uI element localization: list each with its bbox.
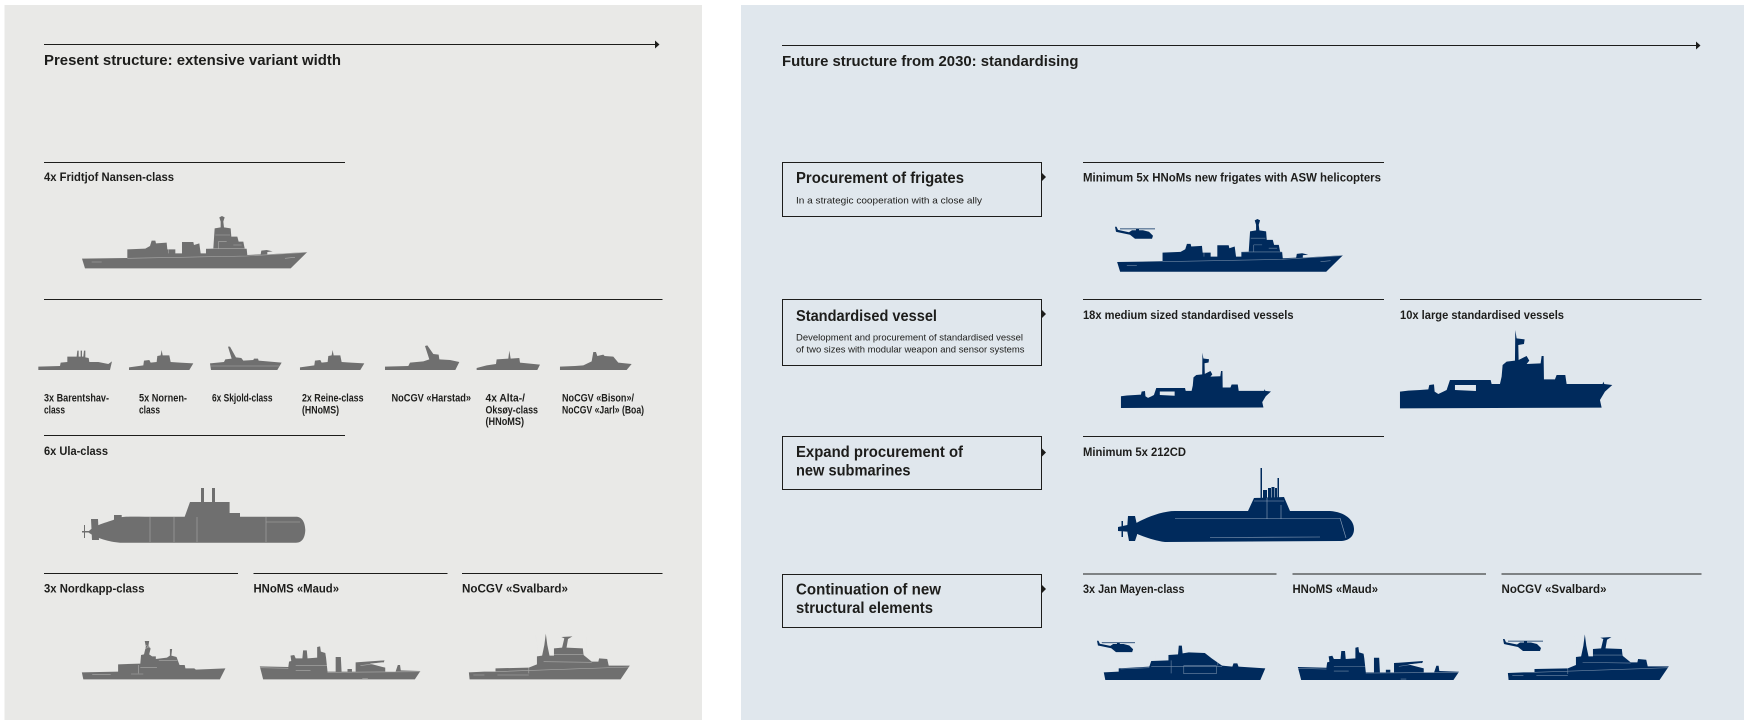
icon: helicopter bbox=[1097, 641, 1135, 652]
group: Nordkapp-class: 3x Nordkapp-class bbox=[44, 584, 144, 596]
group: Maud future: HNoMS «Maud» bbox=[1292, 584, 1378, 596]
callout: new structural elements: structural elements bbox=[796, 600, 933, 617]
label: Alta/Oksøy-class bbox=[486, 392, 538, 428]
icon: small vessels row, first four bbox=[38, 347, 364, 370]
label: Nornen-class: class bbox=[139, 404, 160, 416]
group: Maud bbox=[254, 574, 448, 679]
icon: navy submarine bbox=[1118, 468, 1354, 542]
label: Barentshav-class: class bbox=[44, 404, 65, 416]
group: 212CD bbox=[1083, 436, 1384, 542]
callout: procurement of frigates: In a strategic cooperation with a close ally bbox=[796, 196, 982, 206]
callout: standardised vessel bbox=[782, 300, 1046, 366]
group: Svalbard future bbox=[1502, 574, 1702, 680]
label: Nornen-class bbox=[139, 392, 187, 416]
icon: helicopter bbox=[1115, 227, 1155, 239]
label: Bison/Jarl bbox=[562, 392, 644, 416]
group: small vessels bbox=[38, 300, 662, 428]
icon: large vessel bbox=[1400, 330, 1612, 408]
label: Reine-class: 2x Reine-class bbox=[302, 392, 364, 404]
arrow: future timeline bbox=[782, 42, 1700, 50]
group: large vessels bbox=[1400, 300, 1702, 408]
group: Maud future bbox=[1292, 574, 1486, 680]
group: Svalbard future: NoCGV «Svalbard» bbox=[1502, 584, 1606, 596]
callout: expand submarines: new submarines bbox=[796, 462, 910, 480]
icon: grey frigate bbox=[82, 216, 307, 268]
group: Jan Mayen-class bbox=[1083, 574, 1276, 680]
group: Svalbard: NoCGV «Svalbard» bbox=[462, 584, 568, 596]
heading: future structure: Future structure from 2030: standardising bbox=[782, 54, 1078, 70]
callout: standardised vessel: of two sizes with modular weapon and sensor systems bbox=[796, 344, 1025, 356]
label: Alta/Oksøy-class: (HNoMS) bbox=[486, 416, 524, 428]
icon: medium vessel bbox=[1121, 353, 1271, 408]
callout: standardised vessel: Development and procurement of standardised vessel bbox=[796, 332, 1023, 344]
group: Nordkapp-class bbox=[44, 574, 238, 679]
callout: new structural elements bbox=[782, 574, 1046, 628]
group: Svalbard bbox=[462, 574, 662, 679]
callout: standardised vessel: Standardised vessel bbox=[796, 308, 937, 325]
callout: expand submarines bbox=[782, 436, 1046, 490]
group: Ula-class bbox=[44, 436, 345, 543]
group: Maud: HNoMS «Maud» bbox=[254, 584, 339, 596]
group: large vessels: 10x large standardised vessels bbox=[1400, 310, 1564, 322]
icon: navy frigate bbox=[1117, 219, 1343, 272]
label: Bison/Jarl: NoCGV «Jarl» (Boa) bbox=[562, 404, 644, 416]
group: 212CD: Minimum 5x 212CD bbox=[1083, 447, 1186, 459]
callout: procurement of frigates: Procurement of frigates bbox=[796, 170, 964, 187]
group: Jan Mayen-class: 3x Jan Mayen-class bbox=[1083, 584, 1184, 596]
icon: navy Svalbard ship bbox=[1508, 634, 1669, 680]
callout: new structural elements: Continuation of new bbox=[796, 582, 942, 598]
group: Fridtjof Nansen-class bbox=[44, 162, 345, 268]
group: medium vessels: 18x medium sized standardised vessels bbox=[1083, 310, 1294, 322]
panel: future structure bbox=[741, 5, 1744, 720]
group: new frigates: Minimum 5x HNoMs new frigates with ASW helicopters bbox=[1083, 172, 1381, 184]
icon: grey Nordkapp ship bbox=[82, 641, 225, 679]
callout: procurement of frigates bbox=[782, 162, 1046, 216]
label: Harstad: NoCGV «Harstad» bbox=[392, 392, 471, 404]
panel: present structure bbox=[4, 5, 702, 720]
label: Skjold-class: 6x Skjold-class bbox=[212, 392, 272, 404]
icon: Jan Mayen ship bbox=[1104, 646, 1265, 680]
group: new frigates bbox=[1083, 162, 1384, 272]
icon: grey submarine bbox=[82, 488, 305, 543]
icon: navy Maud ship bbox=[1298, 647, 1459, 680]
group: medium vessels bbox=[1083, 300, 1384, 408]
heading: present structure: Present structure: extensive variant width bbox=[44, 53, 341, 69]
label: Reine-class bbox=[302, 392, 364, 416]
callout: expand submarines: Expand procurement of bbox=[796, 444, 964, 461]
label: Barentshav-class bbox=[44, 392, 109, 416]
label: Bison/Jarl: NoCGV «Bison»/ bbox=[562, 392, 634, 404]
icon: helicopter bbox=[1503, 639, 1543, 651]
label: Nornen-class: 5x Nornen- bbox=[139, 392, 187, 404]
icon: grey Svalbard ship bbox=[469, 634, 630, 679]
label: Alta/Oksøy-class: Oksøy-class bbox=[486, 404, 538, 416]
group: Ula-class: 6x Ula-class bbox=[44, 446, 108, 458]
label: Barentshav-class: 3x Barentshav- bbox=[44, 392, 109, 404]
icon: grey Maud ship bbox=[260, 646, 420, 679]
label: Alta/Oksøy-class: 4x Alta-/ bbox=[486, 392, 525, 404]
arrow: present timeline bbox=[44, 40, 660, 48]
icon: small vessels row, last three bbox=[385, 345, 632, 370]
group: Fridtjof Nansen-class: 4x Fridtjof Nansen-class bbox=[44, 172, 174, 184]
label: Reine-class: (HNoMS) bbox=[302, 404, 339, 416]
